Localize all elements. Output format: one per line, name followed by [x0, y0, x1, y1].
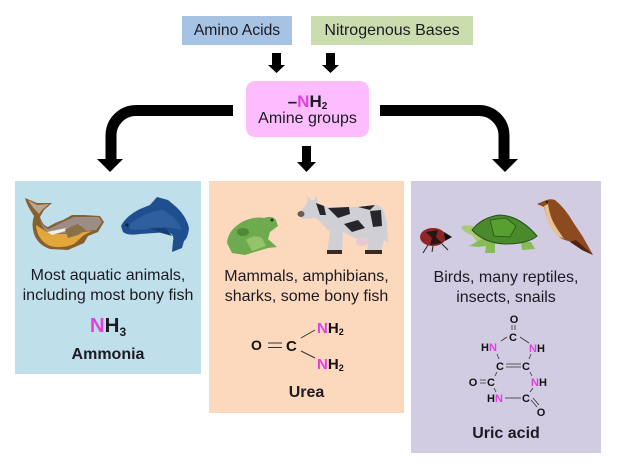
box: amino acids [182, 16, 292, 45]
diagram: urea structure: C [286, 338, 297, 355]
diagram: urea structure: 2 [339, 327, 344, 337]
text: uric acid animals: insects, snails [456, 289, 556, 306]
text: urea animals [224, 268, 389, 305]
label: ammonia: Ammonia [72, 346, 144, 363]
diagram: uric acid structure: C [522, 361, 530, 373]
diagram: uric acid structure: C [496, 361, 504, 373]
panel: uric acid [411, 181, 601, 453]
box: amine groups [246, 81, 369, 137]
text: uric acid animals: Birds, many reptiles, [434, 269, 578, 286]
formula: NH2: –NH2 [288, 92, 327, 112]
text: urea animals: sharks, some bony fish [225, 288, 388, 305]
diagram: uric acid structure: C [522, 393, 530, 405]
diagram: uric acid structure: C [487, 377, 495, 389]
text: ammonia animals: Most aquatic animals, [31, 267, 185, 284]
diagram: urea structure: NH [317, 320, 339, 337]
diagram: uric acid structure: NH [531, 377, 547, 389]
diagram: urea structure: NH [317, 356, 339, 373]
box: amino acids: Amino Acids [194, 22, 280, 39]
box: nitrogenous bases: Nitrogenous Bases [324, 22, 460, 39]
formula: NH3: NH3 [90, 314, 126, 339]
diagram: uric acid structure: O [510, 314, 519, 326]
diagram: urea structure: 2 [339, 363, 344, 373]
diagram: uric acid structure: NH [529, 343, 545, 355]
text: urea animals: Mammals, amphibians, [224, 268, 389, 285]
text: ammonia animals: including most bony fish [23, 287, 193, 304]
panel: urea [209, 181, 404, 413]
label: amine groups: Amine groups [258, 110, 357, 127]
diagram: uric acid structure: HN [487, 393, 503, 405]
diagram: uric acid structure: HN [481, 342, 497, 354]
label: uric acid: Uric acid [472, 425, 540, 442]
label: urea: Urea [289, 384, 324, 401]
diagram: uric acid structure: O [537, 407, 546, 419]
panel: ammonia [15, 181, 201, 374]
box: nitrogenous bases [311, 16, 473, 45]
text: uric acid animals [434, 269, 578, 306]
diagram: uric acid structure: O [469, 377, 478, 389]
diagram: uric acid structure: C [509, 332, 517, 344]
diagram: urea structure: O [251, 337, 262, 353]
text: ammonia animals [23, 267, 193, 304]
